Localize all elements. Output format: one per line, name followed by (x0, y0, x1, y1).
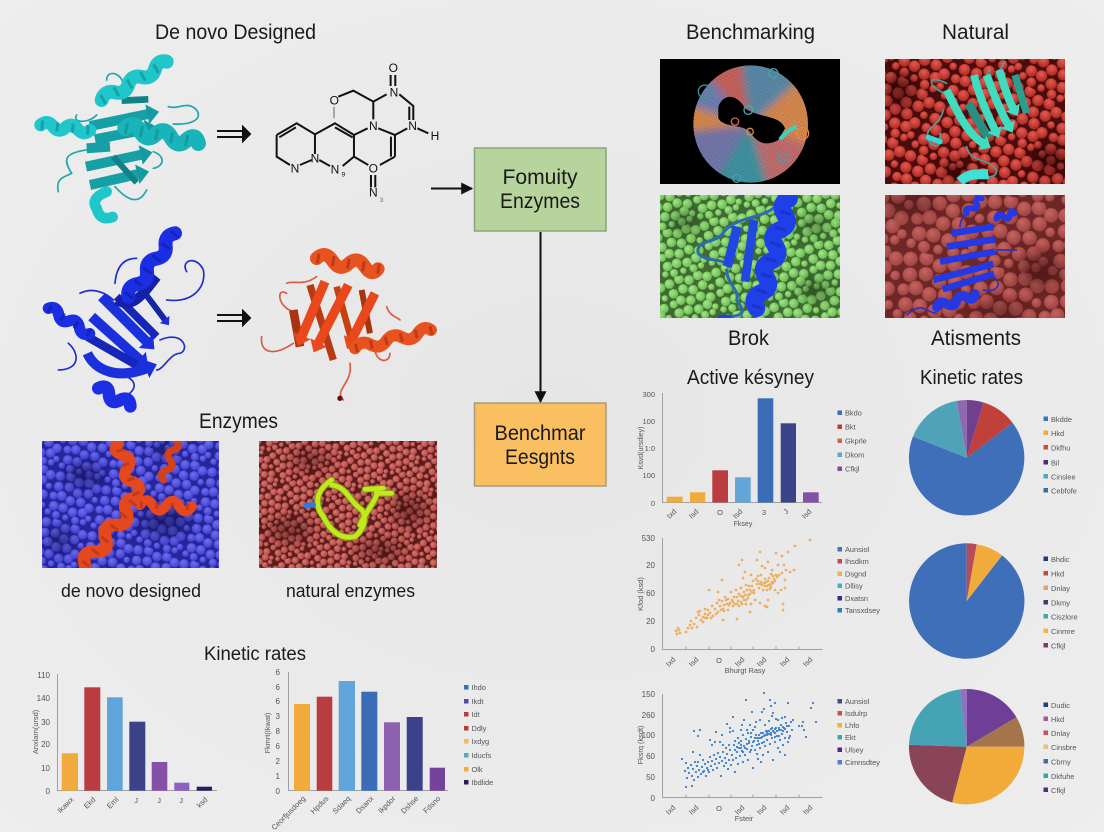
arrow: structure to green box (431, 188, 472, 190)
legend: blue scatter: Ulsey (845, 746, 864, 754)
bar chart: Active: J (781, 507, 791, 516)
bar chart: bottom middle: Sdaeq (331, 794, 352, 816)
box: Fomuity Enzymes: Enzymes (500, 190, 580, 213)
scatter plot: orange: 20 (646, 617, 656, 626)
legend: Active bar chart (838, 408, 867, 474)
bar chart: bottom left: 20 (41, 740, 51, 749)
legend: middle pie: Hkd (1051, 570, 1064, 578)
legend: blue scatter (838, 697, 880, 767)
legend: middle pie: Cinmre (1051, 627, 1075, 636)
panel: de novo designed spheres (42, 441, 219, 568)
bar chart: bottom middle: 2 (276, 757, 281, 766)
legend: bottom pie (1044, 701, 1076, 795)
bar chart: Active: Isd (800, 507, 813, 520)
box: Benchmar Eesgnts: Eesgnts (505, 446, 575, 469)
bar chart: bottom middle: Fdsno (421, 794, 442, 815)
legend: orange scatter: Dsgnd (845, 570, 866, 578)
legend: bottom middle chart: Iducfs (472, 751, 492, 760)
scatter plot: blue: 0 (651, 794, 656, 803)
panel: natural enzyme spheres (259, 441, 437, 568)
legend: orange scatter: Tansxdsey (845, 606, 880, 615)
legend: pie top: Bkdde (1051, 415, 1072, 424)
scatter plot: blue: Fksrq (ksdt) (636, 725, 645, 765)
chemical structure: N (369, 119, 378, 133)
chemical structure: H (431, 129, 439, 143)
caption: natural enzymes: natural enzymes (286, 581, 415, 601)
legend: bottom pie: Cfkjl (1051, 786, 1066, 795)
bar chart: bottom middle: 8 (276, 727, 281, 736)
protein: orange-red ribbon (262, 255, 433, 401)
legend: pie top: Cinslee (1051, 472, 1076, 482)
legend: pie top: Bil (1051, 458, 1060, 468)
arrow: green box to orange box (540, 232, 542, 402)
scatter plot: orange: Isd (733, 655, 746, 668)
bar chart: bottom left: J (157, 796, 161, 805)
bar chart: bottom left: ksd (195, 795, 209, 810)
legend: pie top: Dkfhu (1051, 444, 1070, 452)
bar chart: bottom middle: 1 (276, 772, 281, 781)
legend: bottom pie: Hkd (1051, 715, 1064, 724)
protein: blue ribbon (48, 233, 204, 406)
scatter plot: blue: Isd (687, 803, 700, 816)
scatter plot: orange: Kfod (ksd) (636, 577, 645, 611)
panel: ring assembly on black (660, 59, 840, 184)
legend: bottom middle chart: Ixdyg (472, 737, 489, 746)
scatter plot: orange: Ixd (664, 655, 677, 668)
bar chart: Active: 1:0 (645, 444, 655, 453)
chemical structure: N (390, 86, 398, 100)
heading: De novo Designed: De novo Designed (155, 21, 316, 44)
legend: bottom pie: Dkfuhe (1051, 772, 1074, 781)
legend: orange scatter: Dxatsn (845, 594, 868, 603)
protein: cyan ribbon (41, 61, 200, 218)
scatter plot: orange: Isd (801, 655, 814, 668)
scatter plot: orange: 0 (651, 645, 656, 654)
bar chart: bottom middle: Fkmrt(Ikwat) (263, 712, 272, 754)
legend: bottom pie: Dudic (1051, 701, 1070, 710)
bar chart: bottom left: 30 (41, 718, 51, 727)
legend: Active bar chart: Cfkjl (845, 464, 860, 474)
legend: middle pie (1044, 555, 1078, 650)
bar chart: Active: Fksey (734, 521, 753, 528)
icon: double arrow (217, 127, 250, 141)
legend: bottom pie: Cinsbre (1051, 743, 1076, 752)
bar chart: bottom middle (263, 668, 448, 832)
bar chart: Active: Ixd (665, 507, 678, 520)
heading: Kinetic rates bottom: Kinetic rates (204, 644, 306, 665)
bar chart: Active: 0 (651, 499, 655, 508)
panel: blue protein on green (660, 195, 840, 318)
pie chart: multi-slice (909, 689, 1024, 804)
legend: blue scatter: Ekt (845, 733, 856, 742)
scatter plot: blue: Isd (733, 803, 746, 816)
scatter plot: blue: Isd (801, 803, 814, 816)
chemical structure: N (331, 162, 339, 176)
panel: natural cyan protein on red (885, 59, 1065, 184)
heading: Kinetic rates right: Kinetic rates (920, 367, 1023, 389)
legend: bottom pie: Dnlay (1051, 729, 1070, 738)
scatter plot: blue: Isd (755, 803, 768, 816)
legend: bottom middle chart: Ddly (472, 724, 487, 733)
icon: double arrow (217, 311, 250, 325)
legend: pie top: Hkd (1051, 429, 1064, 438)
box: Fomuity Enzymes (474, 148, 606, 231)
box: Fomuity Enzymes: Fomuity (502, 166, 578, 189)
scatter plot: blue: O (716, 804, 722, 813)
legend: middle pie: Dkmy (1051, 598, 1070, 608)
scatter plot: blue: 100 (642, 731, 656, 740)
bar chart: bottom middle: Ikpdor (376, 794, 398, 815)
chemical structure: O (369, 162, 378, 176)
bar chart: bottom middle: 6 (276, 742, 281, 751)
pie chart: Kinetic rates top (909, 400, 1024, 515)
legend: bottom pie: Cbrny (1051, 758, 1071, 766)
legend: middle pie: Ciszlore (1051, 612, 1078, 622)
heading: Enzymes: Enzymes (199, 410, 278, 433)
scatter plot: orange: Isd (778, 655, 791, 668)
legend: middle pie: Cfkjl (1051, 642, 1066, 650)
legend: pie top (1044, 415, 1077, 496)
chemical structure: 9 (341, 172, 345, 179)
legend: orange scatter: Ihsdkm (845, 557, 869, 566)
box: Benchmar Eesgnts (474, 403, 606, 486)
legend: bottom middle chart (464, 683, 493, 787)
bar chart: Active: Ksvd(ursdiey) (638, 427, 645, 469)
bar chart: bottom left: 0 (46, 787, 51, 796)
heading: Benchmarking: Benchmarking (686, 21, 815, 44)
pie chart: mostly blue (909, 543, 1024, 659)
legend: bottom middle chart: Olk (472, 765, 483, 774)
chemical structure: N (408, 119, 417, 133)
scatter plot: orange: 20 (646, 561, 656, 570)
legend: middle pie: Bhdic (1051, 555, 1070, 564)
bar chart: bottom left: Eml (105, 795, 121, 811)
scatter plot: orange: Bhurgt Rasy (725, 666, 766, 675)
bar chart: bottom left: J (134, 796, 138, 805)
box: Benchmar Eesgnts: Benchmar (494, 422, 586, 445)
heading: Atisments: Atisments (931, 327, 1021, 350)
bar chart: bottom middle: 6 (276, 697, 281, 706)
bar chart: Active: Isd (687, 507, 700, 520)
caption: de novo designed: de novo designed (61, 581, 201, 601)
chemical structure: 3 (380, 198, 384, 204)
legend: bottom middle chart: Ibdlide (472, 778, 493, 787)
scatter plot: blue: 260 (642, 711, 656, 720)
bar chart: Active: 300 (642, 390, 655, 399)
scatter plot: blue: 50 (646, 773, 656, 782)
chemical structure: O (330, 94, 339, 108)
bar chart: bottom left: 140 (37, 694, 51, 703)
bar chart: Active: 100 (642, 471, 655, 480)
scatter plot: orange: 530 (642, 534, 656, 543)
bar chart: bottom middle: 6 (276, 683, 281, 692)
scatter plot: orange: O (716, 656, 722, 665)
legend: Active bar chart: Gkprle (845, 436, 867, 446)
bar chart: bottom middle: Ceorfjusdoeg (269, 794, 307, 832)
scatter plot: blue: Ixd (664, 803, 677, 816)
bar chart: Active: 3 (762, 508, 766, 517)
bar chart: bottom middle: Dshse (399, 794, 420, 815)
scatter plot: orange: Isd (755, 655, 768, 668)
legend: pie top: Cebfofe (1051, 486, 1077, 496)
bar chart: bottom middle: 0 (276, 787, 281, 796)
bar chart: bottom middle: 6 (276, 668, 281, 677)
heading: Active késyney: Active késyney (687, 367, 814, 389)
legend: Active bar chart: Dkom (845, 450, 864, 460)
scatter plot: blue: 60 (646, 752, 656, 761)
bar chart: bottom left: Anxlarn(ursd) (31, 710, 40, 754)
legend: orange scatter: Aunsiol (845, 545, 870, 554)
chemical structure: O (389, 61, 398, 75)
legend: middle pie: Dnlay (1051, 584, 1070, 593)
panel: blue protein on maroon (885, 195, 1065, 318)
chemical structure (277, 61, 439, 204)
bar chart: Active: O (717, 508, 723, 517)
chemical structure: N (291, 162, 299, 176)
bar chart: bottom left: 10 (41, 764, 51, 773)
scatter plot: blue: Isd (778, 803, 791, 816)
legend: blue scatter: Aunsiol (845, 697, 870, 706)
legend: Active bar chart: Bkdo (845, 408, 862, 418)
legend: blue scatter: Lhfo (845, 721, 859, 730)
legend: orange scatter: Dllisy (845, 582, 863, 590)
legend: bottom middle chart: Idt (472, 710, 480, 719)
legend: blue scatter: Cimnsdtey (845, 758, 880, 767)
bar chart: Active: 100 (642, 417, 655, 426)
bar chart: bottom left (31, 671, 217, 815)
bar chart: Active: Isd (731, 507, 744, 520)
bar chart: bottom left: Ikawx (55, 795, 76, 815)
legend: bottom middle chart: Ihdo (472, 683, 486, 692)
chemical structure: N (369, 186, 378, 200)
bar chart: bottom middle: 3 (276, 712, 281, 721)
scatter plot: blue (636, 690, 822, 823)
bar chart: bottom middle: Hpdus (309, 794, 331, 816)
bar chart: bottom left: 110 (37, 671, 51, 680)
scatter plot: blue: Fsteir (735, 814, 754, 823)
heading: Brok: Brok (728, 327, 769, 350)
heading: Natural: Natural (942, 21, 1009, 44)
chemical structure: N (311, 152, 319, 166)
bar chart: bottom left: Ekd (82, 795, 97, 811)
legend: orange scatter (838, 545, 880, 615)
scatter plot: orange: Isd (687, 655, 700, 668)
legend: bottom middle chart: Ikdt (472, 697, 483, 706)
scatter plot: orange: 60 (646, 589, 656, 598)
scatter plot: blue: 150 (642, 690, 656, 699)
legend: Active bar chart: Bkt (845, 422, 856, 432)
bar chart: bottom middle: Dsanx (354, 794, 376, 815)
bar chart: bottom left: J (179, 796, 183, 805)
bar chart: Active (638, 390, 822, 528)
scatter plot: orange (636, 534, 822, 675)
legend: blue scatter: Isdulrp (845, 709, 867, 718)
